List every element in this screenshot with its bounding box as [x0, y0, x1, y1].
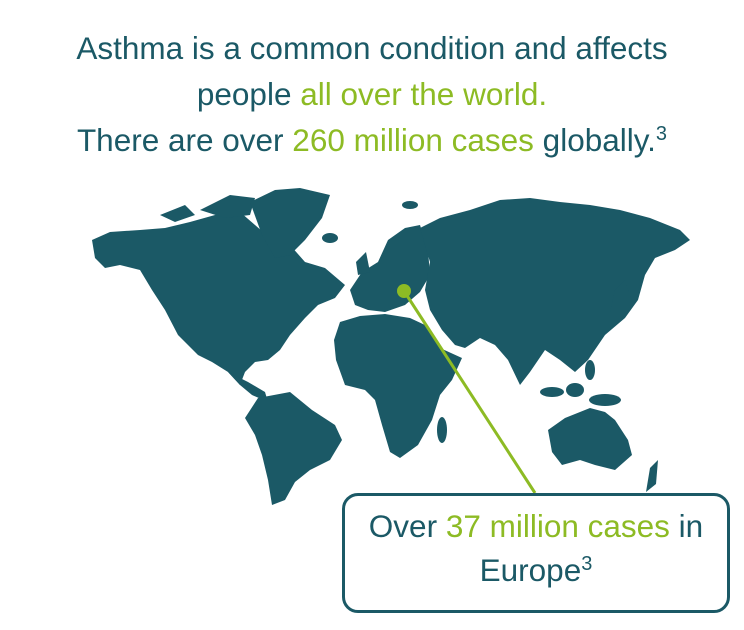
philippines — [585, 360, 595, 380]
title: Asthma is a common condition and affects — [76, 30, 668, 66]
central america — [228, 372, 268, 402]
north america — [92, 212, 345, 385]
canadian islands — [200, 195, 255, 218]
callout line — [404, 291, 535, 493]
madagascar — [437, 417, 447, 443]
africa — [334, 314, 462, 458]
iceland — [322, 233, 338, 243]
title: There are over 260 million cases globally.3 — [77, 122, 667, 158]
callout box: Europe3 — [480, 552, 592, 588]
asia — [420, 198, 690, 385]
new zealand — [646, 460, 658, 492]
europe — [350, 225, 430, 312]
title — [76, 30, 668, 158]
south america — [245, 392, 342, 505]
indonesia — [540, 387, 564, 397]
uk — [356, 252, 370, 275]
svalbard — [402, 201, 418, 209]
australia — [548, 408, 632, 470]
callout box — [342, 493, 730, 613]
callout box: Over 37 million cases in — [369, 508, 703, 544]
title: people all over the world. — [197, 76, 547, 112]
greenland — [250, 188, 330, 258]
callout dot — [397, 284, 411, 298]
japan — [610, 280, 632, 320]
